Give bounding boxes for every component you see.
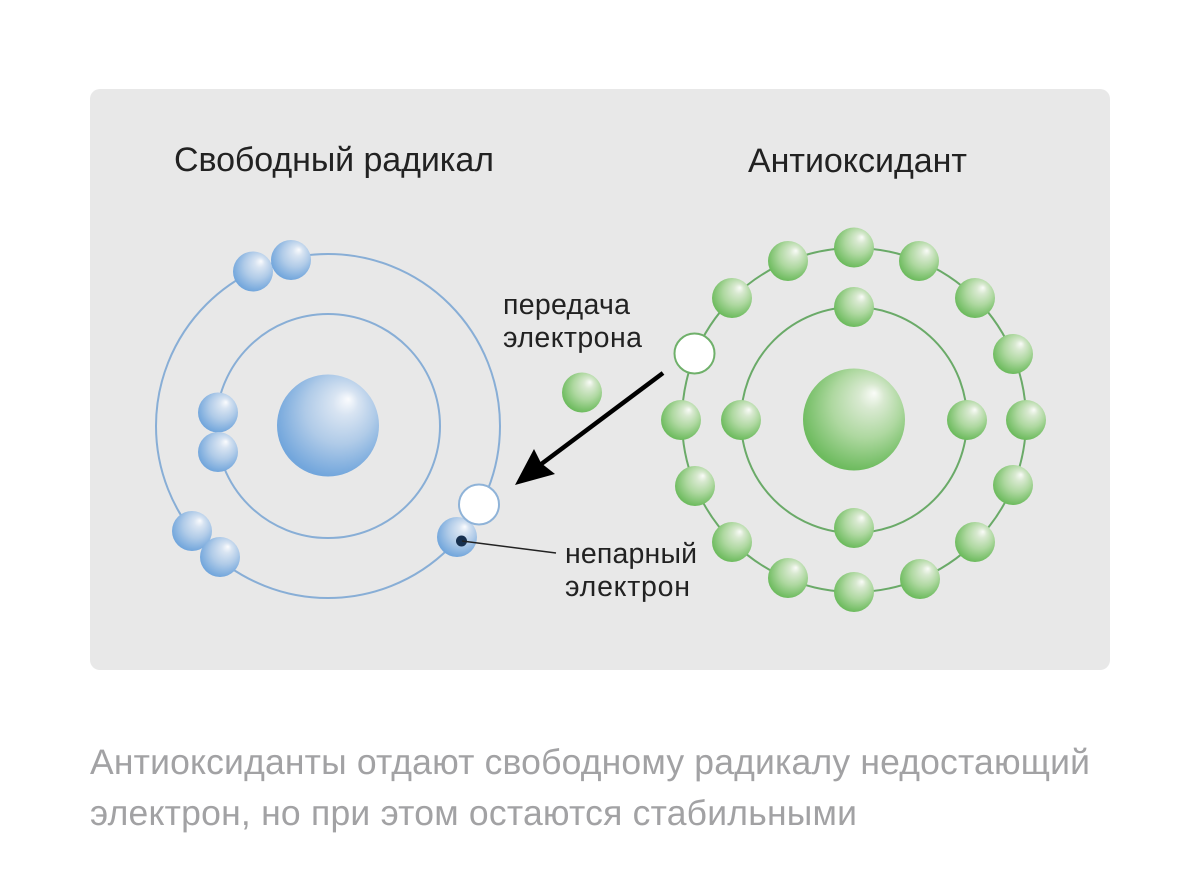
label: electron transfer: электрона — [503, 322, 642, 354]
label: unpaired electron: электрон — [565, 571, 690, 603]
caption: электрон, но при этом остаются стабильными — [90, 793, 857, 833]
antioxidant atom — [661, 228, 1046, 612]
label: electron transfer: передача — [503, 289, 630, 321]
caption: Антиоксиданты отдают свободному радикалу недостающий — [90, 742, 1090, 782]
transferred electron — [562, 372, 602, 412]
free radical atom — [156, 240, 500, 598]
panel: diagram background — [90, 89, 1110, 670]
heading: antioxidant: Антиоксидант — [748, 142, 967, 180]
heading: free radical: Свободный радикал — [174, 141, 494, 179]
label: unpaired electron: непарный — [565, 538, 697, 570]
leader line: unpaired electron — [462, 541, 556, 553]
arrow: electron transfer — [515, 373, 663, 485]
